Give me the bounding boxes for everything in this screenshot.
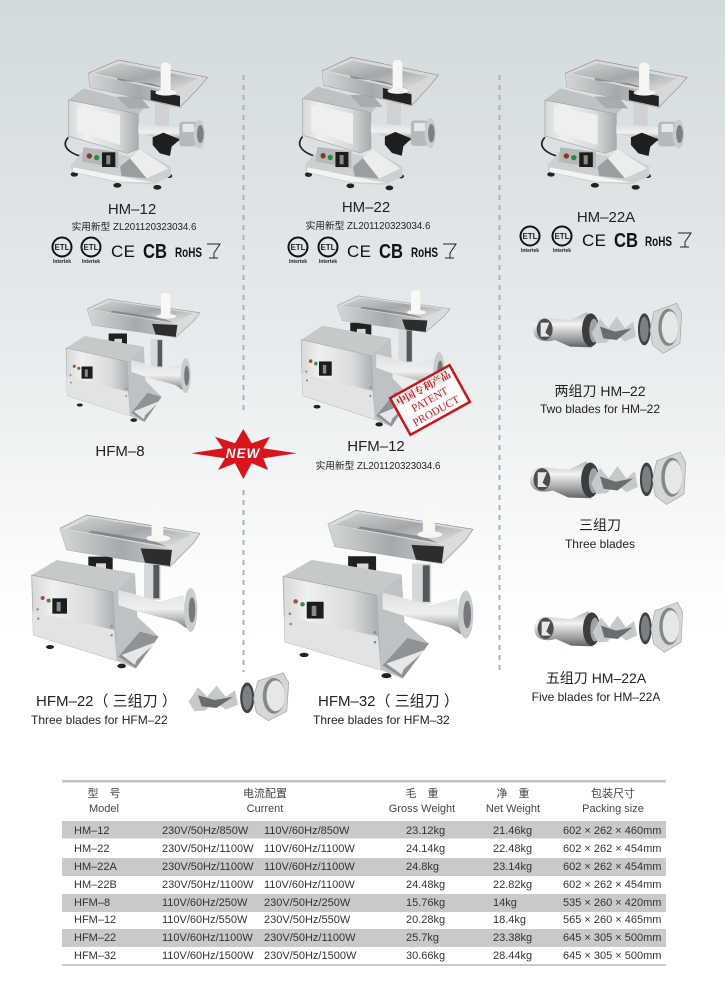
accessory: three blades (530, 452, 686, 551)
row: HM-22: 230V/50Hz/1100W (162, 843, 254, 855)
machine photo: HM-12 (65, 60, 208, 190)
English label: Five blades for HM–22A (532, 690, 660, 704)
patent stamp (390, 365, 470, 435)
table header (88, 786, 644, 815)
machine photo: HM-22A (542, 60, 687, 190)
model name: HFM–32（ 三组刀 ） (318, 693, 459, 710)
row: HFM-8: 230V/50Hz/250W (264, 897, 351, 909)
model name: HFM–12 (347, 438, 405, 455)
row: HM-22: 24.14kg (406, 843, 445, 855)
certification marks: Intertek (289, 259, 307, 265)
row: HM-12: 230V/50Hz/850W (162, 825, 249, 837)
certification marks: CE (347, 242, 371, 261)
row: HFM-32: 110V/60Hz/1500W (162, 950, 254, 962)
certification marks: Intertek (53, 259, 71, 265)
product: HFM-12 (301, 290, 470, 472)
patent number: 实用新型 ZL201120323034.6 (316, 459, 440, 472)
row: HM-22B: 230V/50Hz/1100W (162, 879, 254, 891)
row: HM-22: 22.48kg (493, 843, 532, 855)
row: HM-12: 602 × 262 × 460mm (563, 825, 661, 837)
certification marks: ETL (290, 243, 306, 252)
certification marks: CB (143, 241, 167, 263)
row: HFM-22: 230V/50Hz/1100W (264, 932, 356, 944)
row: HFM-22: 645 × 305 × 500mm (563, 932, 661, 944)
row: HFM-8: 110V/60Hz/250W (162, 897, 248, 909)
patent stamp: PRODUCT (411, 394, 462, 429)
row: HM-22A: 23.14kg (493, 861, 532, 873)
product: HFM-32 (283, 502, 473, 727)
blade assembly (534, 602, 683, 652)
certification marks: ETL (320, 243, 336, 252)
row: HFM-12: 230V/50Hz/550W (264, 914, 351, 926)
blade assembly (530, 452, 686, 504)
row: HFM-12 (74, 914, 661, 926)
product: HFM-8 (66, 293, 200, 460)
row: HFM-8: 15.76kg (406, 897, 445, 909)
row: HFM-22: 23.38kg (493, 932, 532, 944)
table header: Packing size (582, 803, 644, 815)
accessory: five blades (532, 602, 683, 704)
specification table (62, 780, 666, 966)
blade assembly (533, 303, 682, 353)
row: HFM-12: 20.28kg (406, 914, 445, 926)
row: HM-22B: 602 × 262 × 454mm (563, 879, 661, 891)
blade set exploded view (189, 673, 289, 721)
certification marks (52, 238, 220, 265)
Chinese label: 三组刀 (579, 517, 621, 533)
row: HM-12: HM–12 (74, 825, 109, 837)
Chinese label: 两组刀 HM–22 (554, 383, 646, 399)
row: HM-22: 110V/60Hz/1100W (264, 843, 355, 855)
row: HM-22 (74, 843, 661, 855)
English label: Three blades (565, 537, 635, 551)
table header: 包装尺寸 (591, 786, 635, 800)
row: HFM-8: 535 × 260 × 420mm (563, 897, 661, 909)
machine photo: HFM-8 (66, 293, 200, 422)
table header: Current (247, 803, 283, 815)
badge: NEW starburst (191, 429, 297, 479)
table header: 净 重 (496, 786, 530, 800)
row: HFM-12: 18.4kg (493, 914, 526, 926)
certification marks: ETL (522, 232, 538, 241)
patent number: 实用新型 ZL201120323034.6 (306, 219, 430, 232)
row: HFM-8: 14kg (493, 897, 517, 909)
row: HFM-22: 25.7kg (406, 932, 439, 944)
English label: Two blades for HM–22 (540, 402, 660, 416)
certification marks: RoHS (645, 233, 672, 249)
model name: HM–22 (342, 199, 390, 216)
certification marks: CE (582, 231, 606, 250)
row: HM-22B: HM–22B (74, 879, 117, 891)
certification marks: CB (379, 241, 403, 263)
patent stamp: 中国专利产品 (394, 368, 453, 408)
row: HFM-32: 28.44kg (493, 950, 532, 962)
row: HM-22: 602 × 262 × 454mm (563, 843, 661, 855)
row: HFM-32: 230V/50Hz/1500W (264, 950, 357, 962)
row: HFM-32: 645 × 305 × 500mm (563, 950, 661, 962)
row: HM-22B (74, 879, 661, 891)
row: HM-22A: 24.8kg (406, 861, 439, 873)
table header: 型 号 (88, 786, 120, 800)
accessory: two blades (533, 303, 682, 416)
row: HM-22B: 24.48kg (406, 879, 445, 891)
model name: HM–22A (577, 209, 635, 226)
machine photo: HFM-12 (301, 290, 450, 427)
model name: HM–12 (108, 201, 156, 218)
product: HM-22A (520, 60, 691, 254)
row: HM-22A: HM–22A (74, 861, 117, 873)
blade note: Three blades for HFM–22 (31, 713, 168, 727)
machine photo: HFM-22 (32, 507, 200, 668)
table header: 电流配置 (243, 786, 287, 800)
machine photo: HFM-32 (283, 502, 473, 678)
table header: 毛 重 (406, 786, 438, 800)
row: HM-22B: 22.82kg (493, 879, 532, 891)
row: HFM-12: 110V/60Hz/550W (162, 914, 248, 926)
row: HM-22A: 110V/60Hz/1100W (264, 861, 355, 873)
row: HFM-8: HFM–8 (74, 897, 110, 909)
row: HFM-32: HFM–32 (74, 950, 116, 962)
table header: Net Weight (486, 803, 540, 815)
product: HFM-22 (31, 507, 200, 727)
row: HM-12: 110V/60Hz/850W (264, 825, 350, 837)
product: HM-22 (288, 57, 456, 265)
patent stamp: PATENT (410, 385, 451, 415)
row: HFM-12: 565 × 260 × 465mm (563, 914, 661, 926)
model name: HFM–22（ 三组刀 ） (36, 693, 177, 710)
row: HFM-22: 110V/60Hz/1100W (162, 932, 253, 944)
row: HM-22A: 602 × 262 × 454mm (563, 861, 661, 873)
row: HFM-8 (74, 897, 661, 909)
Chinese label: 五组刀 HM–22A (546, 670, 647, 686)
row: HFM-22 (74, 932, 661, 944)
certification marks (520, 226, 691, 254)
certification marks: ETL (554, 232, 570, 241)
row: HM-12: 23.12kg (406, 825, 445, 837)
row: HFM-32: 30.66kg (406, 950, 445, 962)
certification marks: Intertek (319, 259, 337, 265)
row: HM-22: HM–22 (74, 843, 109, 855)
product: HM-12 (52, 60, 220, 265)
row: HM-22A (74, 861, 661, 873)
row: HFM-12: HFM–12 (74, 914, 116, 926)
certification marks: CE (111, 242, 135, 261)
certification marks: CB (614, 230, 638, 252)
certification marks (288, 238, 456, 265)
certification marks: RoHS (411, 244, 438, 260)
machine photo: HM-22 (300, 57, 438, 190)
certification marks: ETL (54, 243, 70, 252)
certification marks: Intertek (521, 248, 539, 254)
certification marks: Intertek (82, 259, 100, 265)
certification marks: ETL (83, 243, 99, 252)
certification marks: Intertek (553, 248, 571, 254)
row: HM-22A: 230V/50Hz/1100W (162, 861, 254, 873)
table header: Model (89, 803, 119, 815)
model name: HFM–8 (95, 443, 145, 460)
row: HM-22B: 110V/60Hz/1100W (264, 879, 355, 891)
patent number: 实用新型 ZL201120323034.6 (72, 220, 196, 233)
row: HM-12 (74, 825, 661, 837)
table header: Gross Weight (389, 803, 455, 815)
row: HFM-22: HFM–22 (74, 932, 116, 944)
badge: NEW starburst: NEW (226, 446, 261, 461)
certification marks: RoHS (175, 244, 202, 260)
row bands (62, 821, 666, 947)
blade note: Three blades for HFM–32 (313, 713, 450, 727)
row: HM-12: 21.46kg (493, 825, 532, 837)
row: HFM-32 (74, 950, 661, 962)
